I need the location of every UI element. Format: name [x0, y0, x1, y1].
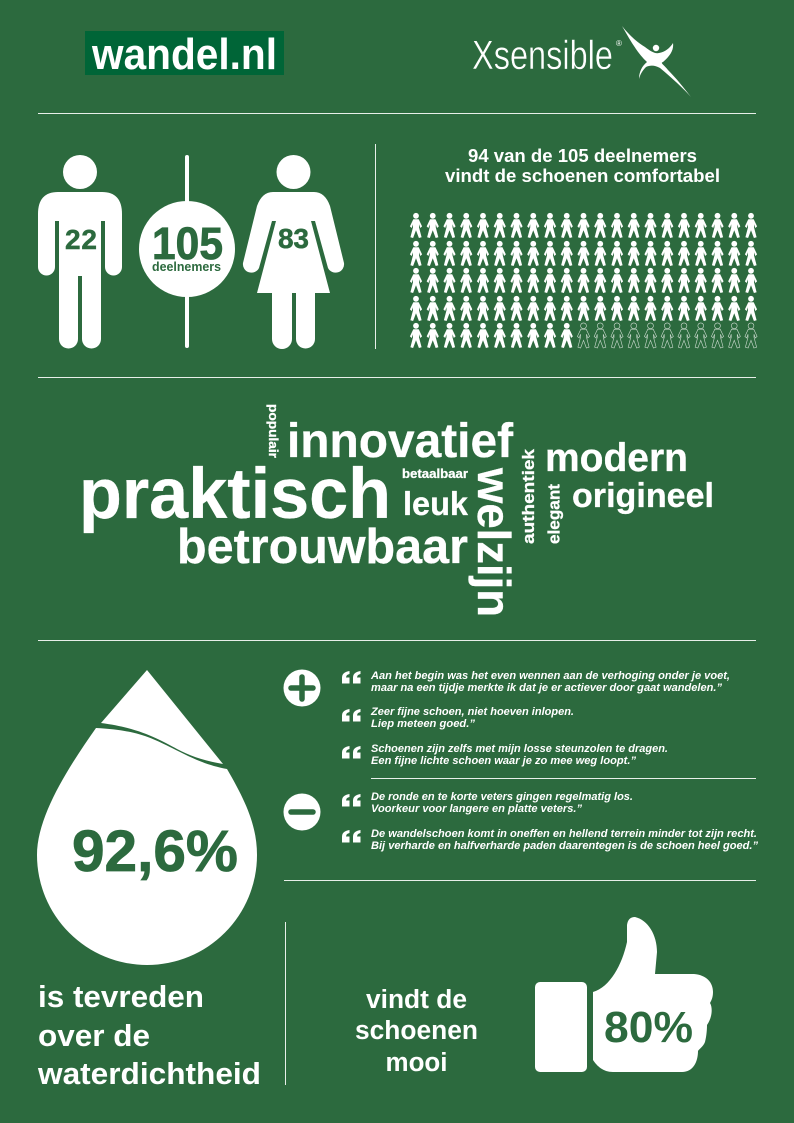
icon: thumbs up 80%: 80% — [604, 1003, 693, 1052]
logo: wandel.nl: wandel.nl — [91, 30, 277, 79]
quote 1 — [342, 670, 730, 694]
icon: woman with 83 — [243, 155, 344, 349]
icon: plus — [284, 670, 320, 706]
quote 2: Zeer fijne schoen, niet hoeven inlopen. — [370, 706, 574, 718]
word cloud: betrouwbaar — [177, 520, 468, 574]
quote 5 — [342, 828, 758, 852]
quote 3 — [342, 743, 668, 767]
quote 3: Schoenen zijn zelfs met mijn losse steunzolen te dragen. — [371, 743, 668, 755]
quote 5: De wandelschoen komt in oneffen en hellend terrein minder tot zijn recht. — [371, 828, 757, 840]
heading: comfort: vindt de schoenen comfortabel — [445, 166, 720, 186]
quote 4: Voorkeur voor langere en platte veters.” — [371, 803, 582, 815]
word cloud: leuk — [403, 485, 469, 522]
total: 105 deelnemers: deelnemers — [152, 260, 221, 274]
quote 4 — [342, 791, 633, 815]
word cloud: elegant — [546, 483, 564, 544]
logo: Xsensible — [472, 26, 691, 97]
word cloud: welzijn — [468, 467, 520, 617]
text: is tevreden over de waterdichtheid — [37, 979, 261, 1091]
word cloud: praktisch — [79, 455, 391, 534]
quote 2: Liep meteen goed.” — [371, 718, 476, 730]
quote 3: Een fijne lichte schoen waar je zo mee weg loopt.” — [371, 755, 637, 767]
heading: comfort — [445, 146, 720, 186]
word cloud: populair — [266, 404, 281, 458]
icon: water drop 92,6%: 92,6% — [72, 819, 238, 884]
quote 2 — [342, 706, 574, 730]
word cloud: modern — [545, 436, 688, 480]
quote 4: De ronde en te korte veters gingen regelmatig los. — [371, 791, 633, 803]
logo: Xsensible: ® — [616, 39, 622, 48]
negative quotes — [342, 791, 758, 852]
total: 105 deelnemers: 105 — [152, 218, 223, 269]
heading: comfort: 94 van de 105 deelnemers — [468, 146, 697, 166]
logo: Xsensible: Xsensible — [472, 32, 613, 78]
icon: man with 22: 22 — [65, 224, 97, 255]
word cloud — [79, 404, 714, 617]
word cloud: betaalbaar — [402, 466, 468, 481]
text: vindt de schoenen mooi: mooi — [386, 1049, 448, 1077]
quote 5: Bij verharde en halfverharde paden daarentegen is de schoen heel goed.” — [371, 840, 758, 852]
quote 1: maar na een tijdje merkte ik dat je er actiever door gaat wandelen.” — [371, 682, 723, 694]
text: vindt de schoenen mooi — [355, 986, 478, 1077]
word cloud: origineel — [572, 477, 714, 515]
quote 1: Aan het begin was het even wennen aan de verhoging onder je voet, — [370, 670, 730, 682]
text: is tevreden over de waterdichtheid: over de — [38, 1018, 150, 1053]
text: vindt de schoenen mooi: vindt de — [366, 986, 467, 1014]
text: vindt de schoenen mooi: schoenen — [355, 1017, 478, 1045]
icon: woman with 83: 83 — [278, 223, 309, 254]
pictogram: 94 of 105 walkers — [410, 213, 757, 348]
total: 105 deelnemers — [139, 155, 235, 348]
text: is tevreden over de waterdichtheid: is tevreden — [38, 979, 204, 1014]
icon: thumbs up 80% — [535, 917, 713, 1072]
text: is tevreden over de waterdichtheid: waterdichtheid — [37, 1056, 261, 1091]
positive quotes — [342, 670, 730, 767]
icon: water drop 92,6% — [37, 670, 257, 965]
word cloud: authentiek — [520, 448, 538, 544]
word cloud: innovatief — [287, 415, 514, 468]
icon: man with 22 — [38, 155, 122, 348]
icon: minus — [284, 794, 320, 830]
